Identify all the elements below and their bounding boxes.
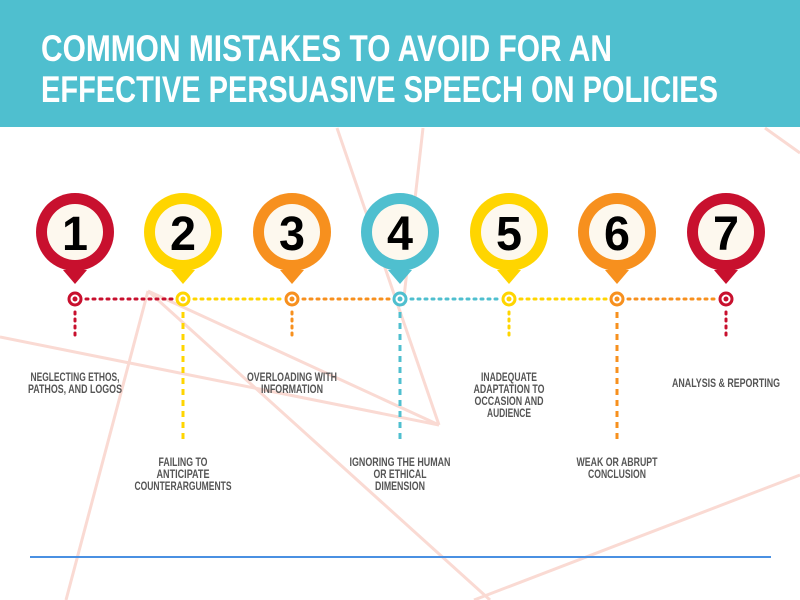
pin 7 [687, 193, 765, 339]
label 5: INADEQUATE [481, 370, 537, 384]
pin 3 [253, 193, 331, 339]
label 3: INFORMATION [261, 382, 323, 396]
label 1: NEGLECTING ETHOS, [30, 370, 120, 384]
pin 6: 6 [604, 208, 630, 261]
pin 3: 3 [279, 208, 305, 261]
label 2: ANTICIPATE [156, 467, 210, 481]
label 4: DIMENSION [375, 479, 425, 493]
timeline dotted connectors [86, 298, 715, 300]
title [41, 28, 718, 110]
pin 4 [361, 193, 439, 439]
labels [28, 370, 780, 493]
label 3: OVERLOADING WITH [247, 370, 337, 384]
label 6: CONCLUSION [588, 467, 646, 481]
label 4: OR ETHICAL [374, 467, 426, 481]
pin 4: 4 [387, 208, 413, 261]
pin 2 [144, 193, 222, 439]
label 1: PATHOS, AND LOGOS [28, 382, 122, 396]
pin 1: 1 [62, 208, 88, 261]
label 4: IGNORING THE HUMAN [350, 455, 450, 469]
label 5: ADAPTATION TO [474, 382, 544, 396]
label 2: COUNTERARGUMENTS [134, 479, 232, 493]
pin 5: 5 [496, 208, 522, 261]
pin 7: 7 [713, 208, 739, 261]
title: COMMON MISTAKES TO AVOID FOR AN [41, 28, 612, 69]
pin 1 [36, 193, 114, 339]
label 2: FAILING TO [158, 455, 208, 469]
label 6: WEAK OR ABRUPT [576, 455, 658, 469]
header banner [0, 0, 800, 127]
label 5: AUDIENCE [487, 406, 531, 420]
pin 2: 2 [170, 208, 196, 261]
pin 6 [578, 193, 656, 439]
pin 5 [470, 193, 548, 339]
label 5: OCCASION AND [474, 394, 544, 408]
